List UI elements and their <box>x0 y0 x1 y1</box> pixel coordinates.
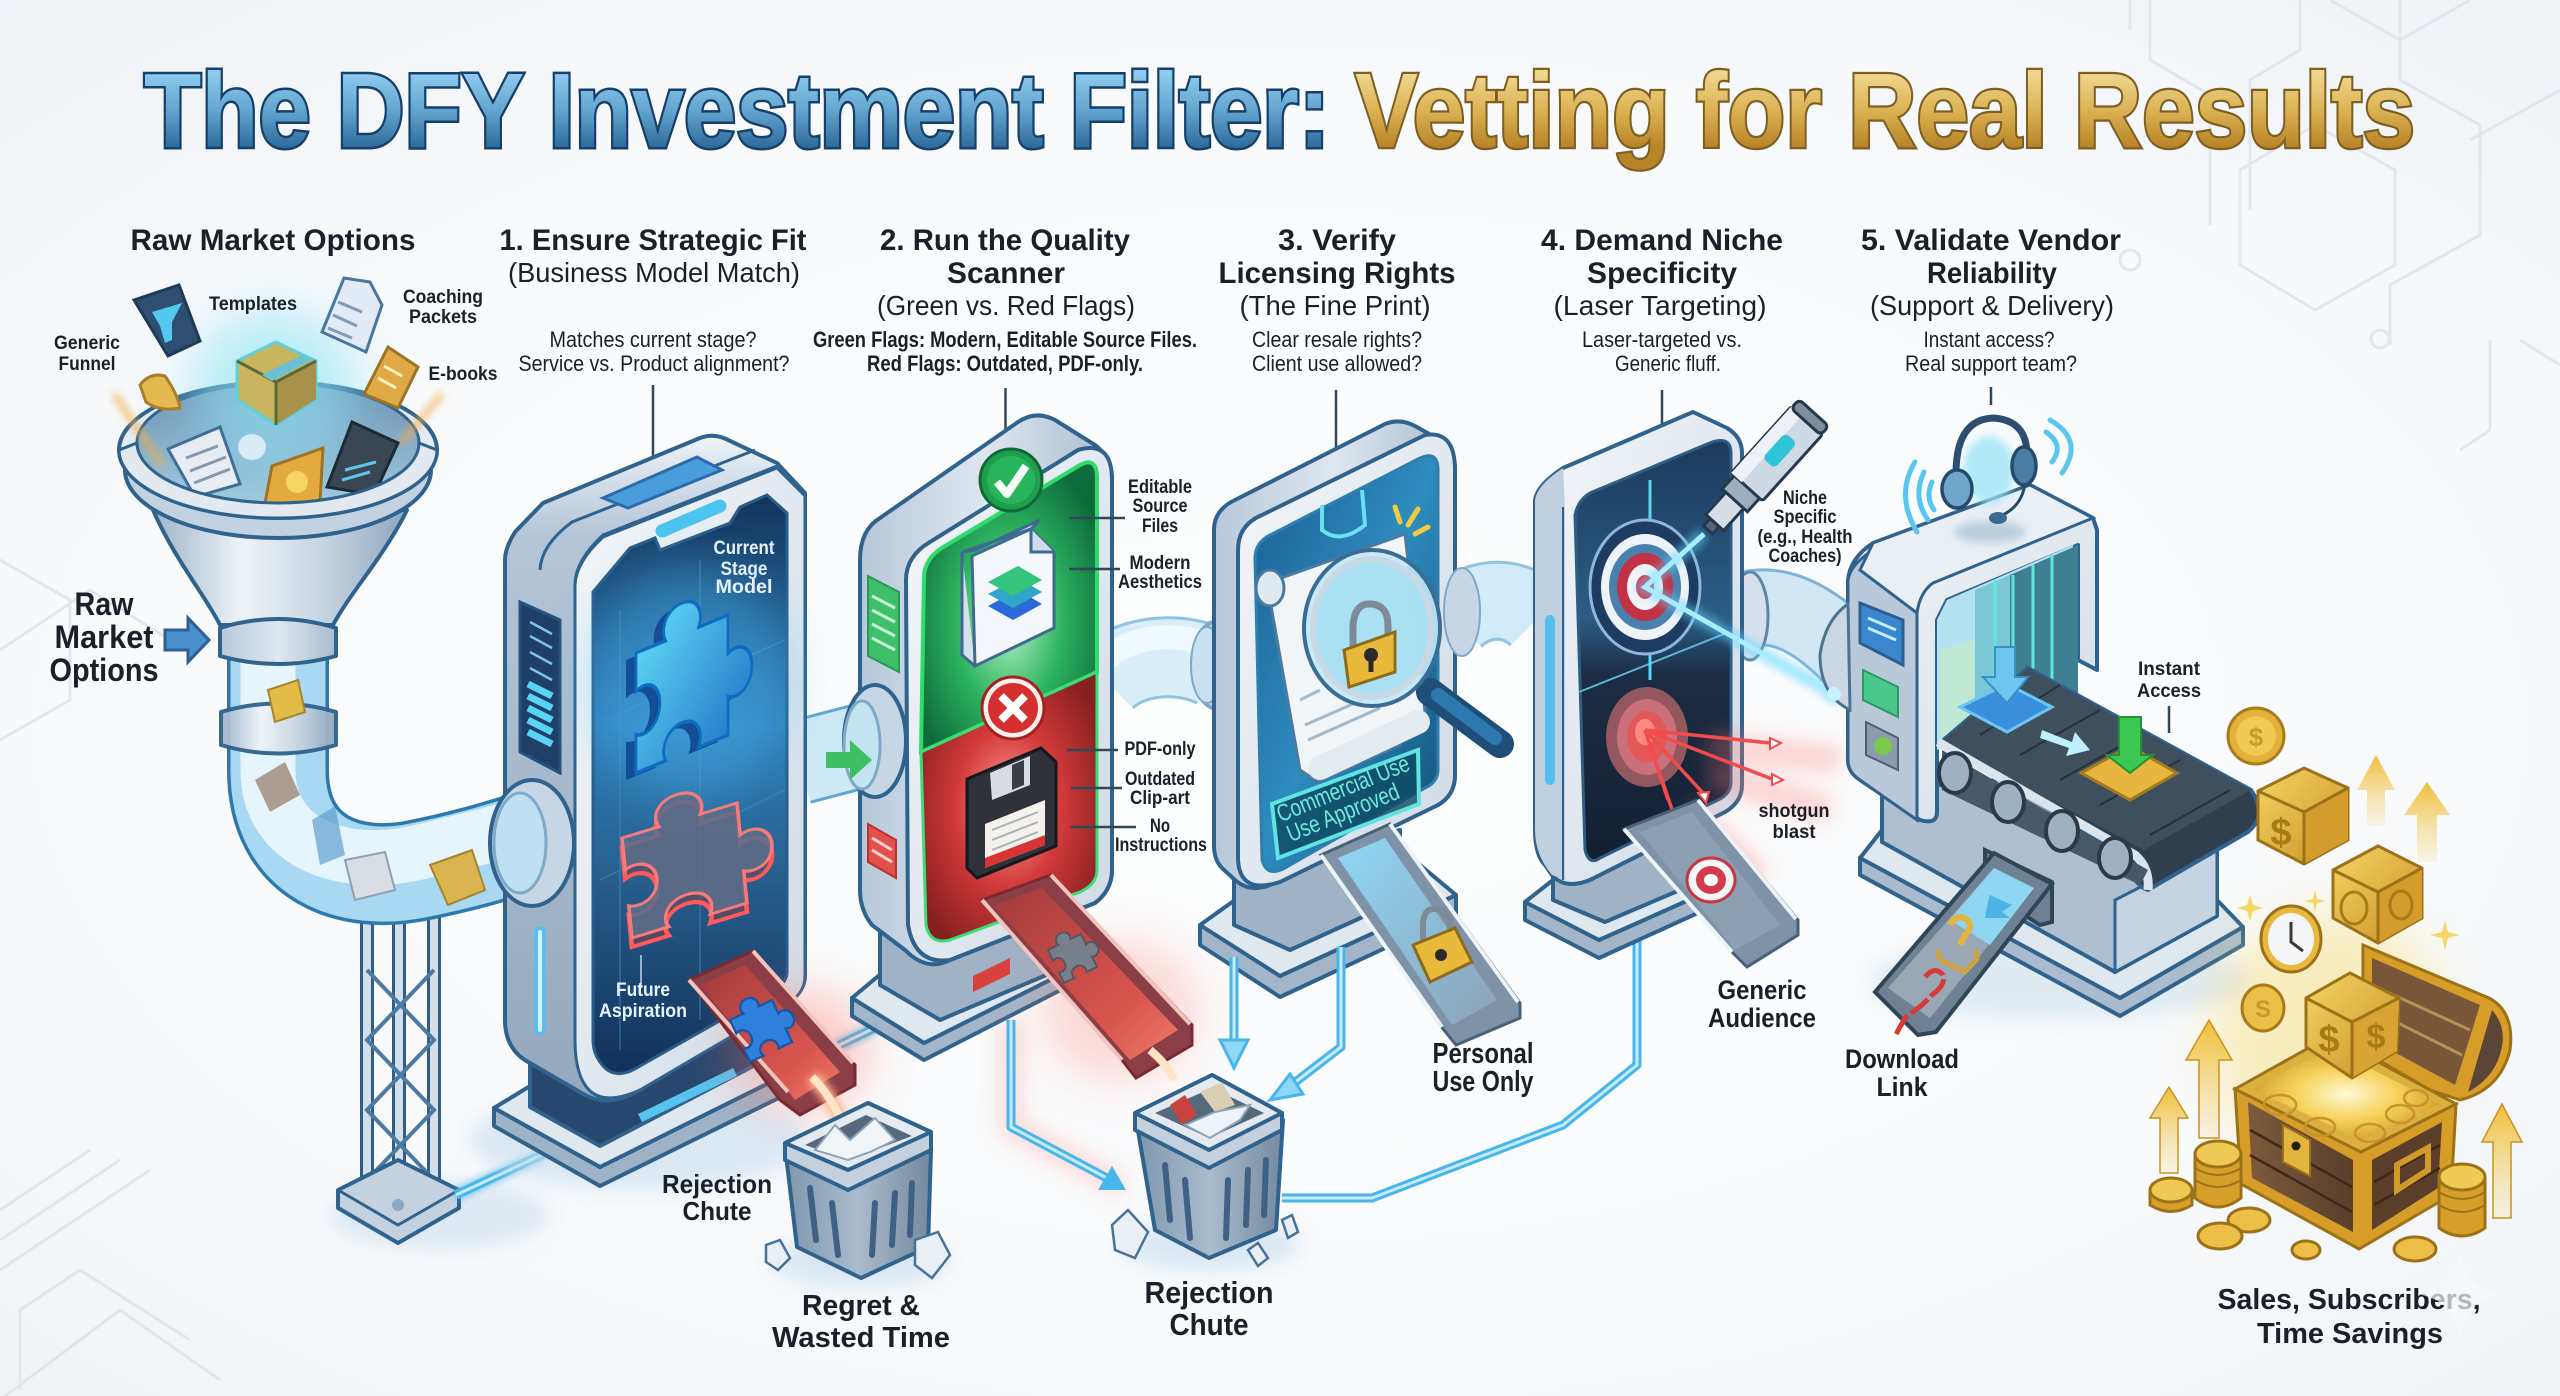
callout labels: Clip-art <box>1130 788 1191 809</box>
crumpled paper <box>1112 1210 1148 1258</box>
callout labels: Outdated <box>1125 769 1195 790</box>
machine 1: strategic fit <box>470 436 810 1190</box>
coin: $ <box>2249 722 2264 752</box>
keyhole plate <box>2283 1125 2310 1176</box>
magnifying glass <box>1304 550 1500 744</box>
body <box>860 415 1112 964</box>
label: sales outcomes <box>2218 1284 2480 1350</box>
title: Vetting for Real Results <box>1355 52 2415 170</box>
label: personal use only: Use Only <box>1432 1066 1534 1098</box>
pipe: machine 3 to machine 4 <box>1455 601 1538 618</box>
label: download link <box>1845 1044 1959 1102</box>
green flag panel <box>921 462 1097 752</box>
funnel item labels: Funnel <box>58 354 116 375</box>
machine 4: niche specificity <box>1525 412 1840 958</box>
base plate <box>470 1000 810 1190</box>
label: regret <box>772 1290 950 1354</box>
screen labels: Model <box>716 577 772 598</box>
chute 4 <box>1624 800 1798 967</box>
funnel collars <box>220 619 336 754</box>
screen <box>593 495 787 1074</box>
padlock on chute <box>1423 909 1450 940</box>
label: raw market options: Market <box>54 619 154 655</box>
pedestal <box>530 1000 765 1146</box>
pipe: machine 1 to machine 2 <box>800 741 880 762</box>
heading: step 4: 4. Demand Niche <box>1541 224 1783 257</box>
base plate <box>1200 840 1456 997</box>
heading: step 3: Licensing Rights <box>1218 257 1456 290</box>
heading: raw market options: Raw Market Options <box>130 224 416 257</box>
icon: x badge <box>982 677 1044 739</box>
funnel rim front <box>119 443 437 518</box>
label: shotgun blast <box>1758 801 1830 843</box>
body <box>1535 412 1742 884</box>
portal interior <box>1937 545 2078 750</box>
headset <box>1905 418 2071 543</box>
icon: padlock <box>1344 604 1395 687</box>
label: personal use only <box>1432 1038 1534 1098</box>
pipe contents <box>255 762 525 905</box>
heading: step 5: Instant access? <box>1924 327 2054 352</box>
gold question mark <box>1938 917 1978 972</box>
front bezel <box>575 468 805 1098</box>
label: raw market options: Raw <box>74 586 134 622</box>
heading: step 5 <box>1861 224 2121 376</box>
heading: step 3: Client use allowed? <box>1252 351 1422 376</box>
reject arrow <box>1150 1050 1174 1080</box>
heading: step 4: Laser-targeted vs. <box>1582 327 1742 352</box>
heading: step 2 <box>813 224 1197 376</box>
heading: step 2: 2. Run the Quality <box>880 224 1130 257</box>
trash can 2 <box>1112 1075 1300 1271</box>
machine 3: licensing rights <box>1200 421 1500 997</box>
top status pill <box>603 457 722 508</box>
red flag panel <box>921 672 1097 941</box>
heading: step 4: Specificity <box>1587 257 1737 290</box>
screen labels <box>599 538 775 1022</box>
label: instant access: Instant <box>2138 659 2201 680</box>
reject arrow <box>812 1077 842 1123</box>
chest body <box>2235 1036 2456 1249</box>
label: rejection chute 2: Chute <box>1170 1307 1248 1342</box>
laser beam <box>1645 534 1843 703</box>
heading: step 2: Scanner <box>947 257 1065 290</box>
heading: step 1: Matches current stage? <box>550 327 756 352</box>
chute 3 <box>1321 824 1520 1045</box>
blue download pad <box>1960 647 2052 732</box>
gold box 3: $ <box>2367 1018 2386 1056</box>
red puzzle outline <box>619 768 777 947</box>
pedestal <box>1234 830 1400 950</box>
label: download link: Link <box>1876 1072 1928 1102</box>
icon: check badge <box>980 449 1042 511</box>
funnel cone <box>153 510 407 625</box>
base plate <box>1860 830 2243 1016</box>
conveyor belt <box>1938 668 2259 890</box>
heading: step 1: (Business Model Match) <box>508 257 800 288</box>
callout labels: Aesthetics <box>1118 572 1202 593</box>
screen <box>1575 440 1731 861</box>
heading: step 2: (Green vs. Red Flags) <box>877 290 1135 321</box>
icon: editable file <box>962 520 1054 666</box>
chute 5 <box>1875 853 2052 1036</box>
body <box>505 436 805 1100</box>
front bezel <box>906 448 1112 961</box>
document scroll <box>1256 534 1425 782</box>
label: instant access: Access <box>2137 681 2201 702</box>
label: personal use only: Personal <box>1432 1038 1534 1070</box>
gold box 1 <box>2258 768 2348 864</box>
glow connector: machine 1 to machine 2 <box>829 1022 887 1050</box>
download slot <box>1985 850 2052 925</box>
funnel items <box>114 278 442 503</box>
puzzle on chute <box>725 984 803 1062</box>
chute 2 <box>982 875 1200 1080</box>
crumpled paper <box>766 1240 790 1270</box>
side panels <box>1860 603 1903 770</box>
label: generic audience <box>1708 975 1816 1033</box>
arrow: raw market options <box>165 618 209 662</box>
label: rejection chute 2: Rejection <box>1144 1275 1274 1310</box>
label: rejection chute 2 <box>1144 1275 1274 1342</box>
chute 1 <box>689 951 870 1123</box>
coin <box>2228 708 2284 764</box>
label: generic audience: Generic <box>1718 975 1806 1005</box>
icon: floppy disk <box>967 748 1056 878</box>
glow connector: machine 4 to trash 2 <box>1282 907 1637 1198</box>
icon: precise target <box>1590 520 1700 654</box>
coin stacks <box>2150 1141 2485 1261</box>
gold box 2 <box>2333 846 2422 943</box>
heading: step 3: 3. Verify <box>1278 224 1396 257</box>
label: niche callout <box>1758 488 1852 567</box>
label: raw market options <box>50 586 158 688</box>
funnel item labels <box>54 287 498 385</box>
yellow ray marks <box>1395 507 1428 534</box>
heading: step 1 <box>500 224 807 376</box>
title: The DFY Investment Filter: <box>144 52 1330 170</box>
base plate <box>1525 840 1700 958</box>
body <box>1214 421 1455 888</box>
handle <box>2397 1148 2428 1190</box>
callout leaders <box>1067 518 1136 827</box>
shotgun rays <box>1645 730 1840 880</box>
pipe: machine 4 to machine 5 <box>1732 572 1850 660</box>
flange: pipe into machine 2 <box>826 685 906 797</box>
sparkles <box>2237 890 2471 1023</box>
label: sales outcomes: Sales, Subscribers, <box>2218 1284 2480 1316</box>
heading: step 1: 1. Ensure Strategic Fit <box>500 224 807 257</box>
heading: step 5: Reliability <box>1927 257 2057 290</box>
label: raw market options: Options <box>50 652 158 688</box>
callout labels: Source <box>1132 496 1188 517</box>
coin 2: S <box>2255 996 2271 1023</box>
lower body <box>1882 770 2217 972</box>
label: regret: Wasted Time <box>772 1322 950 1354</box>
heading: step 4: Generic fluff. <box>1615 351 1721 376</box>
sparkle watermark <box>2418 1252 2502 1336</box>
label: generic audience: Audience <box>1708 1003 1816 1033</box>
side readout <box>520 602 560 773</box>
label: rejection chute 1 <box>662 1169 772 1226</box>
screen <box>1255 456 1438 872</box>
chest lid <box>2363 945 2511 1100</box>
funnel item labels: Generic <box>54 333 120 354</box>
funnel item labels: Templates <box>209 294 297 315</box>
rewards: treasure chest and gold <box>2150 708 2522 1261</box>
pedestal <box>880 890 1070 1020</box>
heading: step 5: (Support & Delivery) <box>1870 290 2114 321</box>
arch frame <box>1848 485 2097 821</box>
callout labels: Editable <box>1128 477 1192 498</box>
red glow connector: machine 2 to trash <box>1011 1020 1126 1190</box>
callout labels: Instructions <box>1115 835 1207 856</box>
flange: pipe into machine 5 <box>1820 604 1850 710</box>
gold pad with green arrow <box>2081 717 2177 800</box>
heading: step 2: Green Flags: Modern, Editable Source Files. <box>813 327 1197 352</box>
side readouts <box>868 576 899 878</box>
title <box>144 52 2415 170</box>
callout labels <box>1115 477 1207 856</box>
label: niche callout: (e.g., Health <box>1758 527 1852 548</box>
front bezel <box>1238 434 1455 886</box>
label: download link: Download <box>1845 1044 1959 1074</box>
screen labels: Aspiration <box>599 1001 687 1022</box>
blue puzzle piece <box>590 565 790 795</box>
heading: step 3: (The Fine Print) <box>1240 290 1430 321</box>
signal waves <box>1905 420 2071 532</box>
label: rejection chute 1: Chute <box>682 1196 752 1226</box>
heading: step 4: (Laser Targeting) <box>1554 290 1766 321</box>
callout labels: PDF-only <box>1124 739 1196 760</box>
funnel item labels: Coaching <box>403 287 483 308</box>
label: instant access <box>2137 659 2201 702</box>
gold box 3 <box>2306 973 2399 1078</box>
flange: pipe into machine 4 region <box>1444 568 1480 656</box>
funnel item labels: E-books <box>428 364 498 385</box>
funnel rim <box>125 402 431 538</box>
label: regret: Regret & <box>802 1290 920 1322</box>
label: sales outcomes: Time Savings <box>2257 1318 2443 1350</box>
heading: step 5: 5. Validate Vendor <box>1861 224 2121 257</box>
glow connector: tower to machine 1 <box>456 1150 552 1195</box>
label: niche callout: Coaches) <box>1768 546 1842 567</box>
screen labels: Stage <box>720 559 768 580</box>
flange: pipe into machine 1 <box>490 780 574 906</box>
funnel item labels: Packets <box>409 307 477 328</box>
heading: step 3 <box>1218 224 1456 376</box>
gold box 3: $ <box>2318 1019 2340 1061</box>
machine 2: quality scanner <box>852 415 1207 1060</box>
label: shotgun blast: shotgun <box>1758 801 1830 822</box>
shadow <box>1870 940 2250 1020</box>
coin 2 <box>2242 985 2284 1031</box>
callout labels: No <box>1150 816 1170 837</box>
support tower <box>330 905 550 1249</box>
machine 5: vendor reliability <box>1848 418 2259 1036</box>
callout labels: Modern <box>1130 553 1190 574</box>
heading: step 3: Clear resale rights? <box>1252 327 1422 352</box>
heading: step 2: Red Flags: Outdated, PDF-only. <box>867 351 1143 376</box>
trash can 1 <box>766 1103 950 1288</box>
label: rejection chute 1: Rejection <box>662 1169 772 1199</box>
screen labels: Current <box>714 538 775 559</box>
commercial use stamp: Use Approved <box>1283 778 1403 848</box>
heading: step 1: Service vs. Product alignment? <box>518 351 790 376</box>
glow <box>2210 910 2450 1170</box>
rollers <box>1939 750 2148 885</box>
glass pipe from funnel <box>255 650 540 905</box>
base plate <box>852 900 1090 1060</box>
icon: clock <box>2261 906 2321 972</box>
gold box 1: $ <box>2270 812 2292 854</box>
heading: step 5: Real support team? <box>1905 351 2077 376</box>
callout labels: Files <box>1142 516 1178 537</box>
label: niche callout: Niche <box>1783 488 1827 509</box>
commercial use stamp: Commercial Use <box>1273 750 1414 828</box>
pipe: machine 2 to machine 3 <box>1105 637 1215 680</box>
grey puzzle on chute <box>1044 921 1106 983</box>
glow connectors: machine 3 to trash 2 <box>1220 947 1341 1100</box>
label: niche callout: Specific <box>1774 507 1837 528</box>
laser pointer <box>1692 399 1830 544</box>
icon: blurred target <box>1606 687 1688 787</box>
small target on chute <box>1687 858 1735 902</box>
label: shotgun blast: blast <box>1772 822 1816 843</box>
transfer arrow <box>2040 730 2090 756</box>
commercial use stamp <box>1272 750 1419 858</box>
funnel <box>114 278 442 754</box>
red question mark <box>1895 970 1944 1036</box>
growth arrows <box>2150 755 2522 1218</box>
screen labels: Future <box>616 980 670 1001</box>
flange: pipe into machine 3 <box>1191 621 1244 709</box>
pedestal <box>1553 820 1680 922</box>
heading: step 4 <box>1541 224 1783 376</box>
